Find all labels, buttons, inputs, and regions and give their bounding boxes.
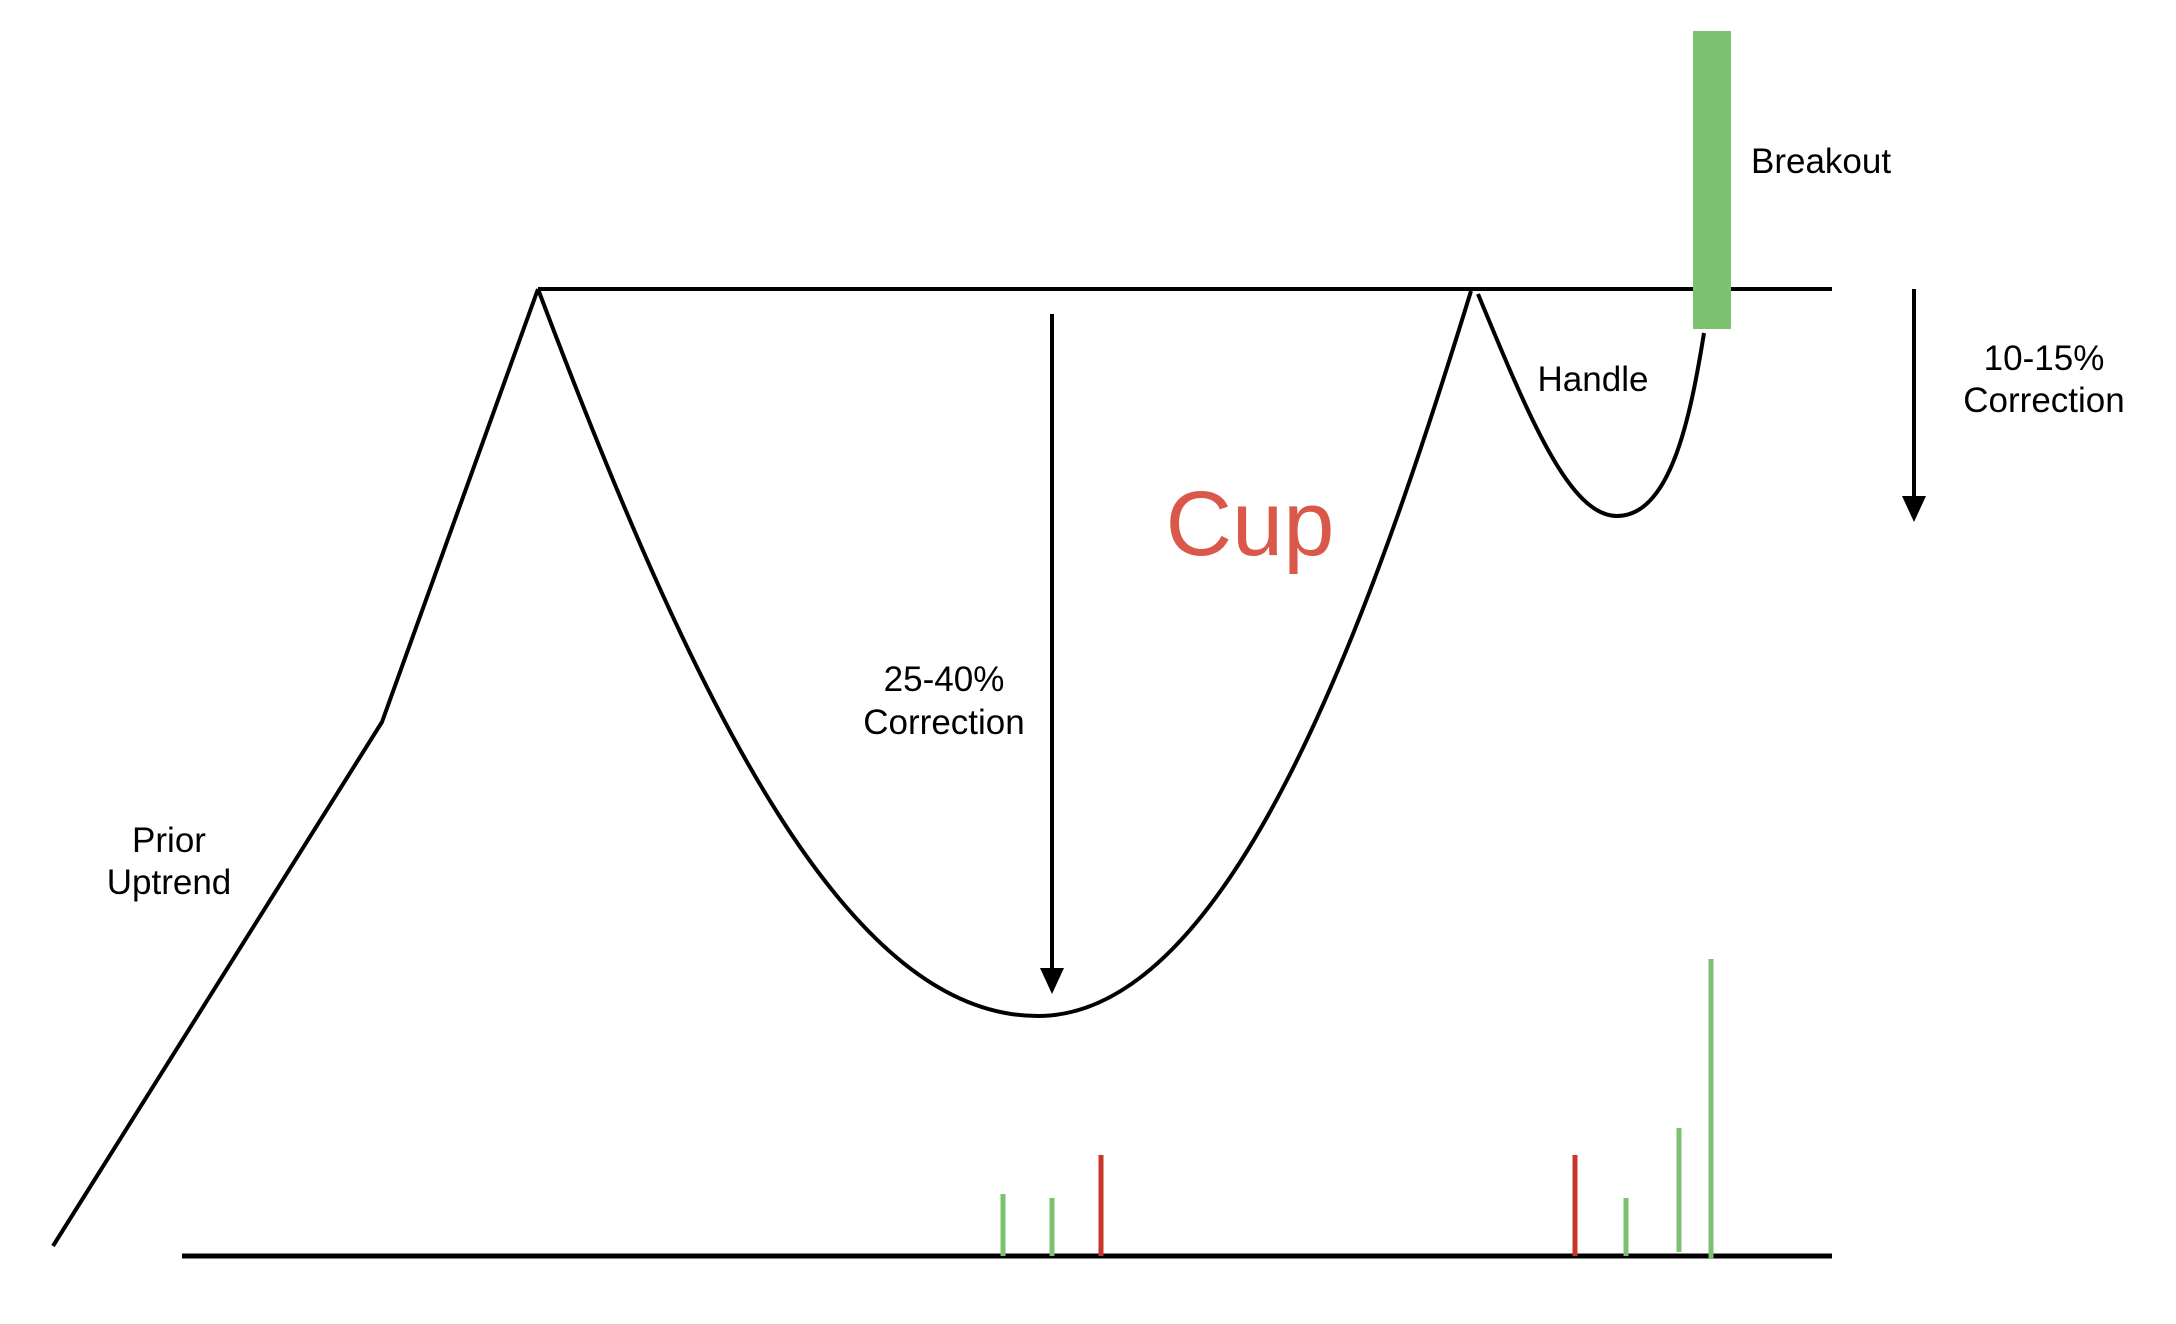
cup correction label: Correction (863, 703, 1025, 742)
arrow: handle correction (1902, 289, 1926, 522)
cup correction label (863, 660, 1025, 742)
cup curve (538, 289, 1471, 1016)
cup correction label: 25-40% (884, 660, 1004, 699)
cup label: Cup (1166, 473, 1334, 575)
volume bars (1003, 959, 1711, 1259)
prior uptrend line (53, 289, 538, 1246)
handle curve (1478, 294, 1704, 516)
arrow: cup correction (1040, 314, 1064, 994)
handle correction label: 10-15% (1984, 339, 2104, 378)
prior uptrend label: Prior (132, 821, 206, 860)
handle label: Handle (1538, 360, 1648, 399)
breakout label: Breakout (1751, 142, 1891, 181)
prior uptrend label (107, 821, 231, 902)
breakout bar (1693, 31, 1731, 329)
handle correction label: Correction (1963, 381, 2125, 420)
resistance top line (538, 287, 1832, 291)
volume baseline (182, 1254, 1832, 1258)
handle correction label (1963, 339, 2125, 420)
prior uptrend label: Uptrend (107, 863, 231, 902)
